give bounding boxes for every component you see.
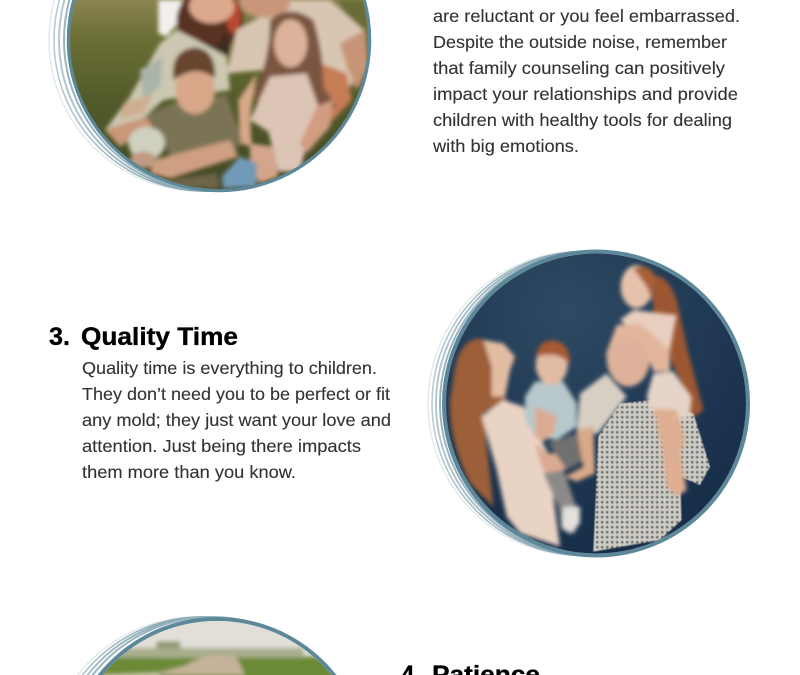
text block: quality time paragraph: They don’t need you to be perfect or fit xyxy=(82,384,390,404)
text block: quality time paragraph: any mold; they just want your love and xyxy=(82,410,391,430)
text block: counseling paragraph continued: Despite the outside noise, remember xyxy=(433,32,727,52)
photo circle 3: partially visible child in field xyxy=(76,616,336,675)
text block: counseling paragraph continued: children with healthy tools for dealing xyxy=(433,110,732,130)
text block: quality time paragraph: Quality time is everything to children. xyxy=(82,358,377,378)
text block: counseling paragraph continued: impact your relationships and provide xyxy=(433,84,738,104)
text block: quality time paragraph: attention. Just being there impacts xyxy=(82,436,361,456)
photo circle 2: family on navy backdrop xyxy=(428,250,760,560)
text block: counseling paragraph continued: with big emotions. xyxy=(432,136,579,156)
heading: 3. Quality Time: Quality Time xyxy=(81,323,238,351)
photo circle 1: family in field xyxy=(49,0,380,200)
text block: counseling paragraph continued: that family counseling can positively xyxy=(433,58,725,78)
text block: counseling paragraph continued xyxy=(432,6,740,156)
text block: quality time paragraph: them more than you know. xyxy=(82,462,296,482)
text block: quality time paragraph xyxy=(82,358,391,482)
heading: 3. Quality Time: 3. xyxy=(49,323,70,351)
text block: counseling paragraph continued: are reluctant or you feel embarrassed. xyxy=(433,6,740,26)
